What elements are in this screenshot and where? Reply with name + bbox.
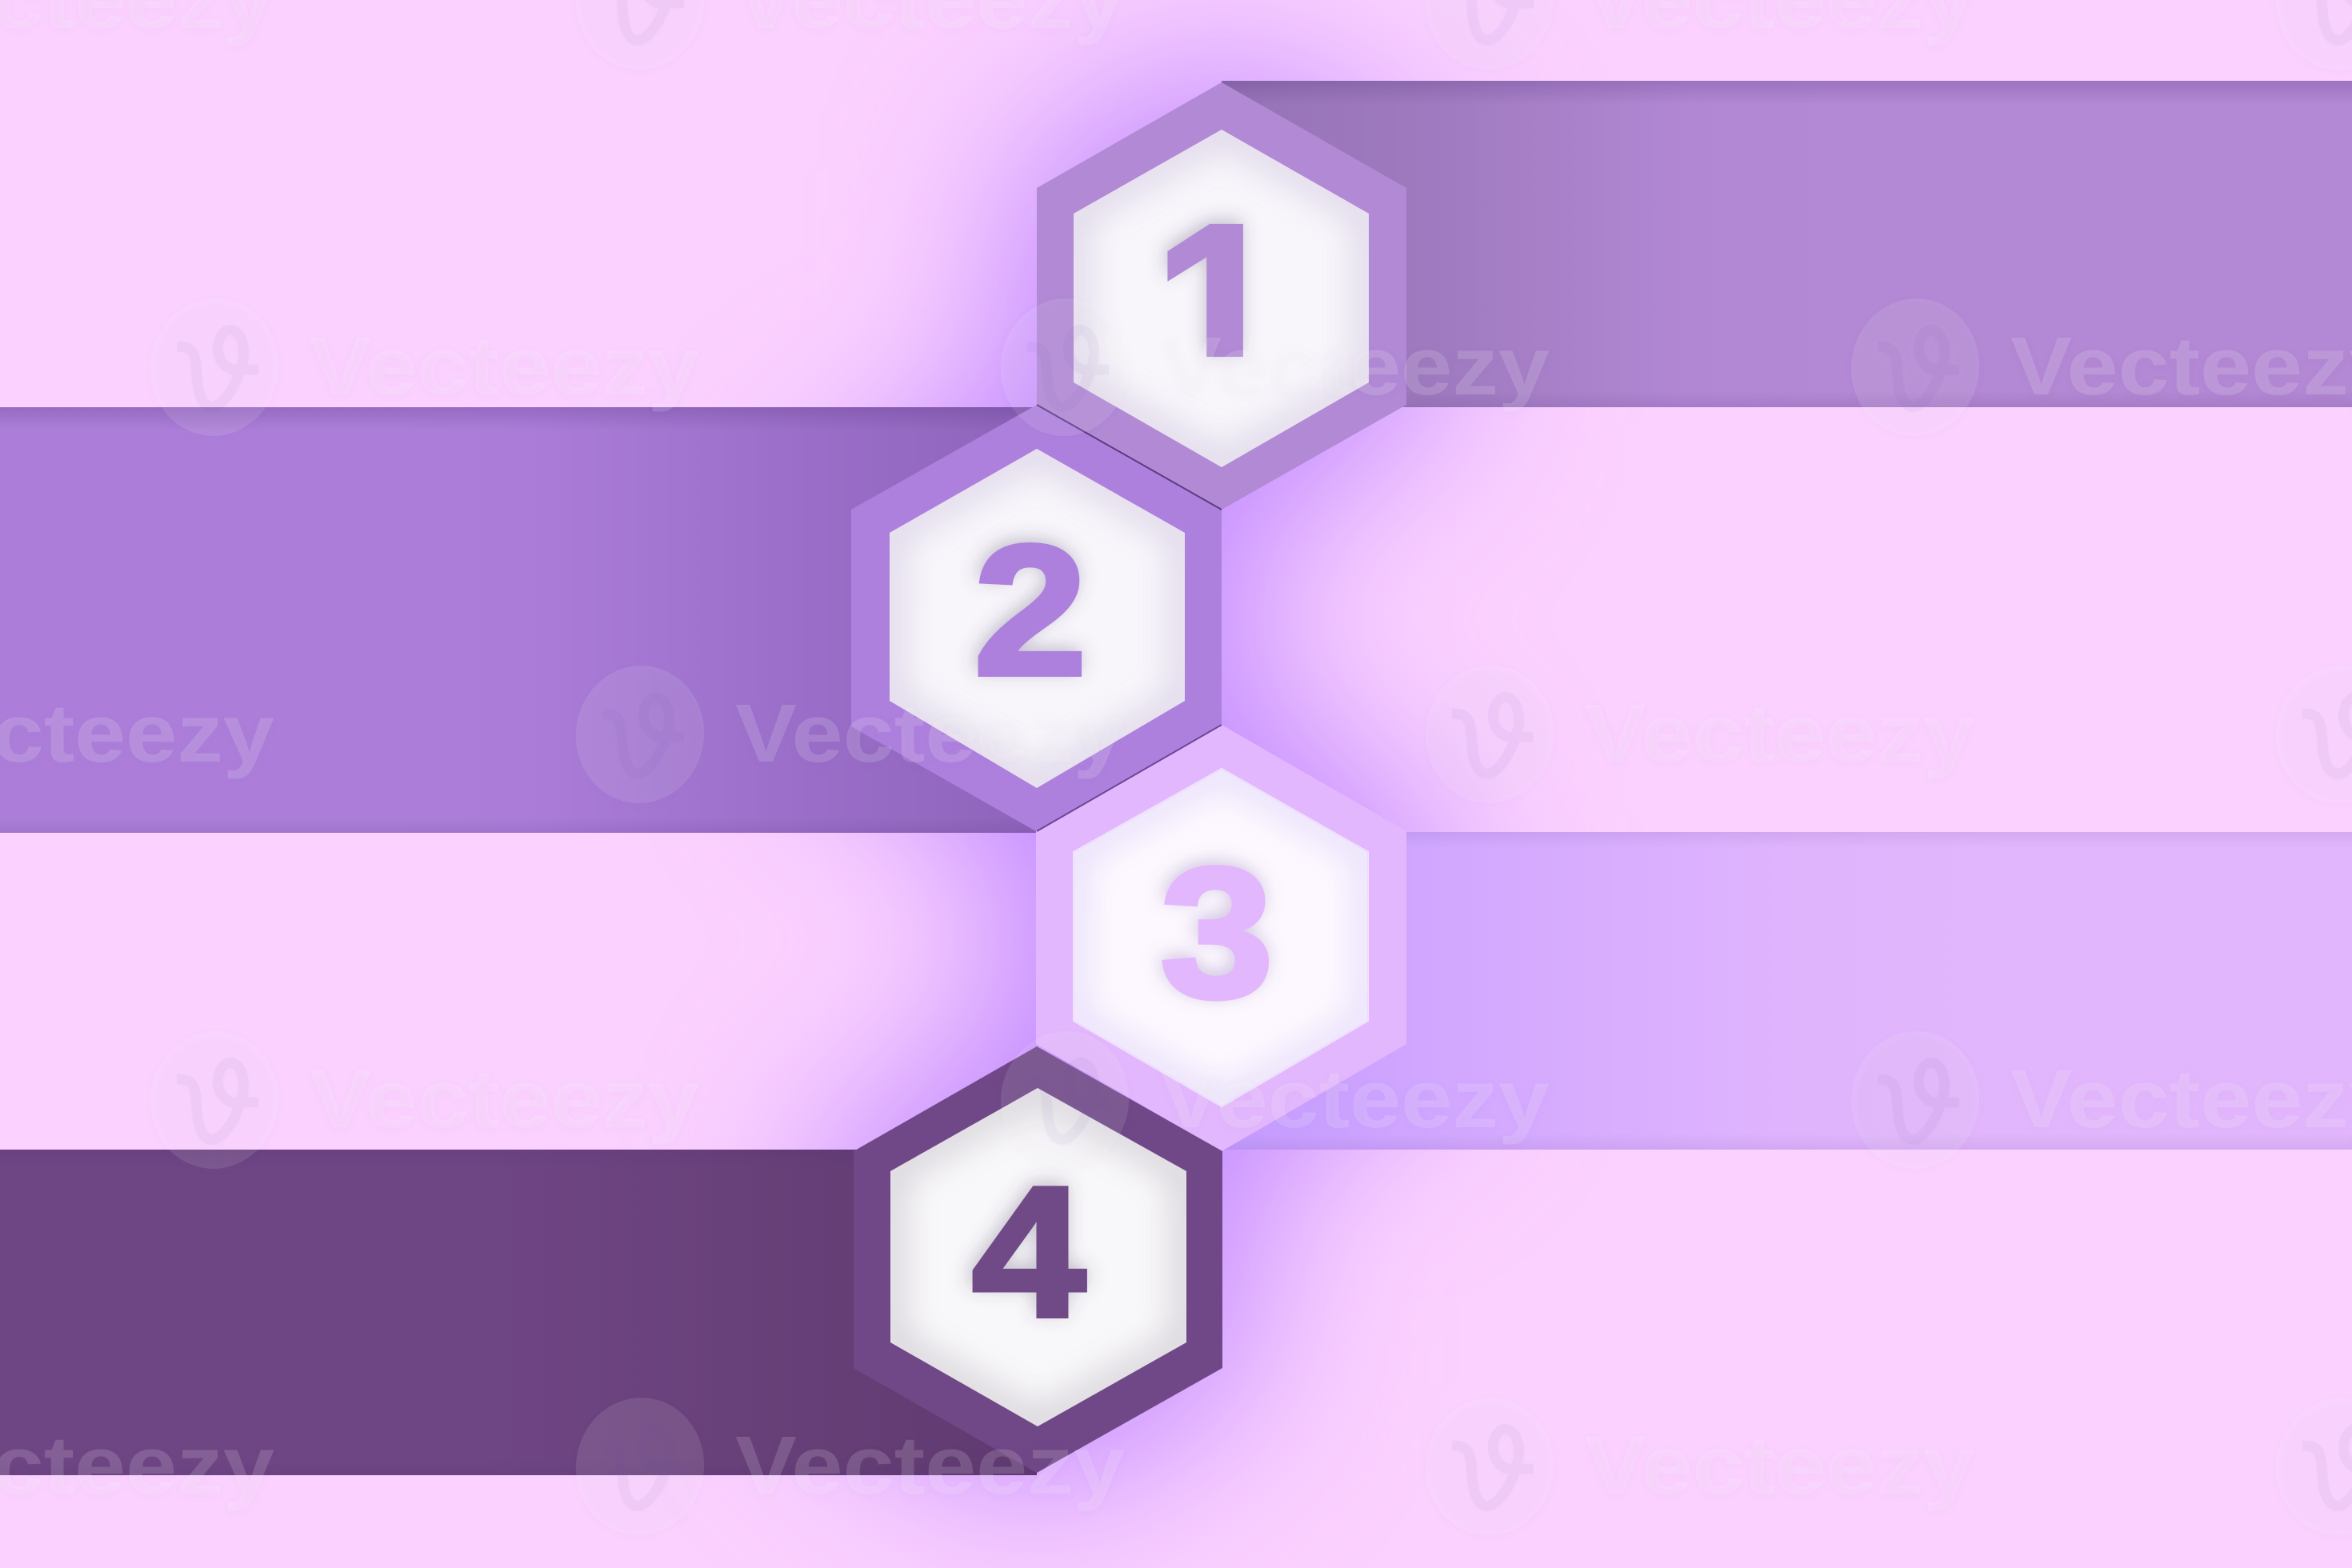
band 1: right dark lilac strip [1222, 81, 2352, 407]
watermark row 4: Vecteezy [735, 1419, 1125, 1511]
watermark row 4 [0, 1390, 2352, 1543]
watermark row 0 [0, 0, 2352, 78]
watermark row 3 [142, 1023, 2352, 1177]
band 2: left medium purple strip [0, 407, 1037, 833]
watermark row 1 [142, 290, 2352, 444]
number 3: 3 [1160, 829, 1274, 1036]
band 4: left deep plum strip [0, 1150, 1037, 1475]
watermark row 4: Vecteezy [1585, 1419, 1974, 1511]
watermark row 3: Vecteezy [310, 1053, 699, 1145]
watermark row 3: Vecteezy [2010, 1053, 2352, 1145]
watermark row 2 [0, 658, 2352, 811]
watermark row 2: Vecteezy [735, 687, 1125, 779]
violet glow around hexagons [851, 82, 1406, 1473]
watermark row 2: Vecteezy [1585, 687, 1974, 779]
watermark row 1: Vecteezy [310, 320, 699, 412]
watermark row 1: Vecteezy [2010, 320, 2352, 412]
number 4: 4 [972, 1148, 1086, 1355]
hexagon 2 with number [851, 405, 1222, 831]
watermark row 3: Vecteezy [1160, 1053, 1550, 1145]
number 1: 1 [1154, 174, 1285, 439]
hexagon 3 with number [1036, 725, 1406, 1151]
number 2: 2 [974, 506, 1087, 714]
hexagon 1 with number [1037, 82, 1406, 510]
watermark row 1: Vecteezy [1160, 320, 1550, 412]
hexagon 4 with number [854, 1046, 1222, 1473]
band 3: right pale violet strip [1222, 832, 2352, 1150]
